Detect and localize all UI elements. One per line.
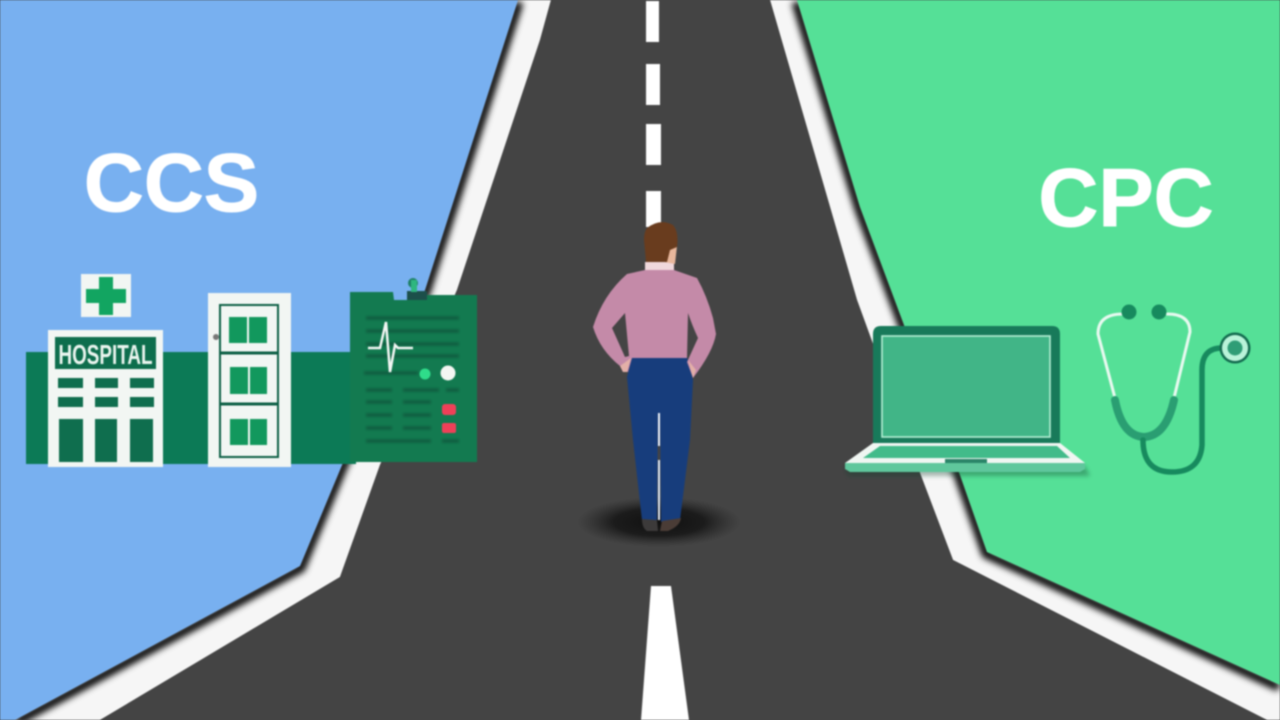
lower tube yoke <box>1115 400 1174 437</box>
green band <box>26 352 356 464</box>
icon: stethoscope <box>1098 304 1250 472</box>
main tube <box>1143 348 1222 472</box>
heading: CPC: CPC <box>1038 151 1214 244</box>
hospital illustration group <box>26 274 477 467</box>
heading: CCS: CCS <box>84 136 259 229</box>
icon: hospital door <box>208 293 291 467</box>
hands <box>620 358 696 378</box>
left road shoulder <box>0 0 551 720</box>
icon: medical clipboard <box>350 278 477 462</box>
laptop shadow <box>845 466 1090 476</box>
clipboard text lines <box>364 318 459 441</box>
laptop <box>845 326 1090 476</box>
sweater <box>593 270 716 378</box>
panel: blue CCS side <box>0 0 518 720</box>
person seen from behind <box>593 222 716 531</box>
laptop base <box>845 443 1085 472</box>
road centre dashes <box>641 1 689 720</box>
chest piece <box>1220 332 1250 364</box>
shoes <box>642 518 681 531</box>
status dots <box>420 366 456 433</box>
collar and neck <box>645 246 677 274</box>
ear tips <box>1122 304 1166 320</box>
hair <box>644 222 678 262</box>
laptop screen <box>873 326 1060 443</box>
gap between left arm and torso <box>612 313 629 357</box>
icon: hospital building: HOSPITAL <box>58 339 152 370</box>
icon: hospital building <box>48 330 163 467</box>
road surface left repaint <box>100 0 760 720</box>
right road shoulder <box>740 0 1280 720</box>
ear tubes <box>1098 314 1190 398</box>
ECG trace <box>368 322 413 372</box>
person shadow <box>577 497 741 547</box>
trousers <box>627 357 693 522</box>
icon: medical cross sign <box>81 274 131 317</box>
clipboard clip <box>407 278 427 300</box>
panel: green CPC side <box>797 0 1280 685</box>
